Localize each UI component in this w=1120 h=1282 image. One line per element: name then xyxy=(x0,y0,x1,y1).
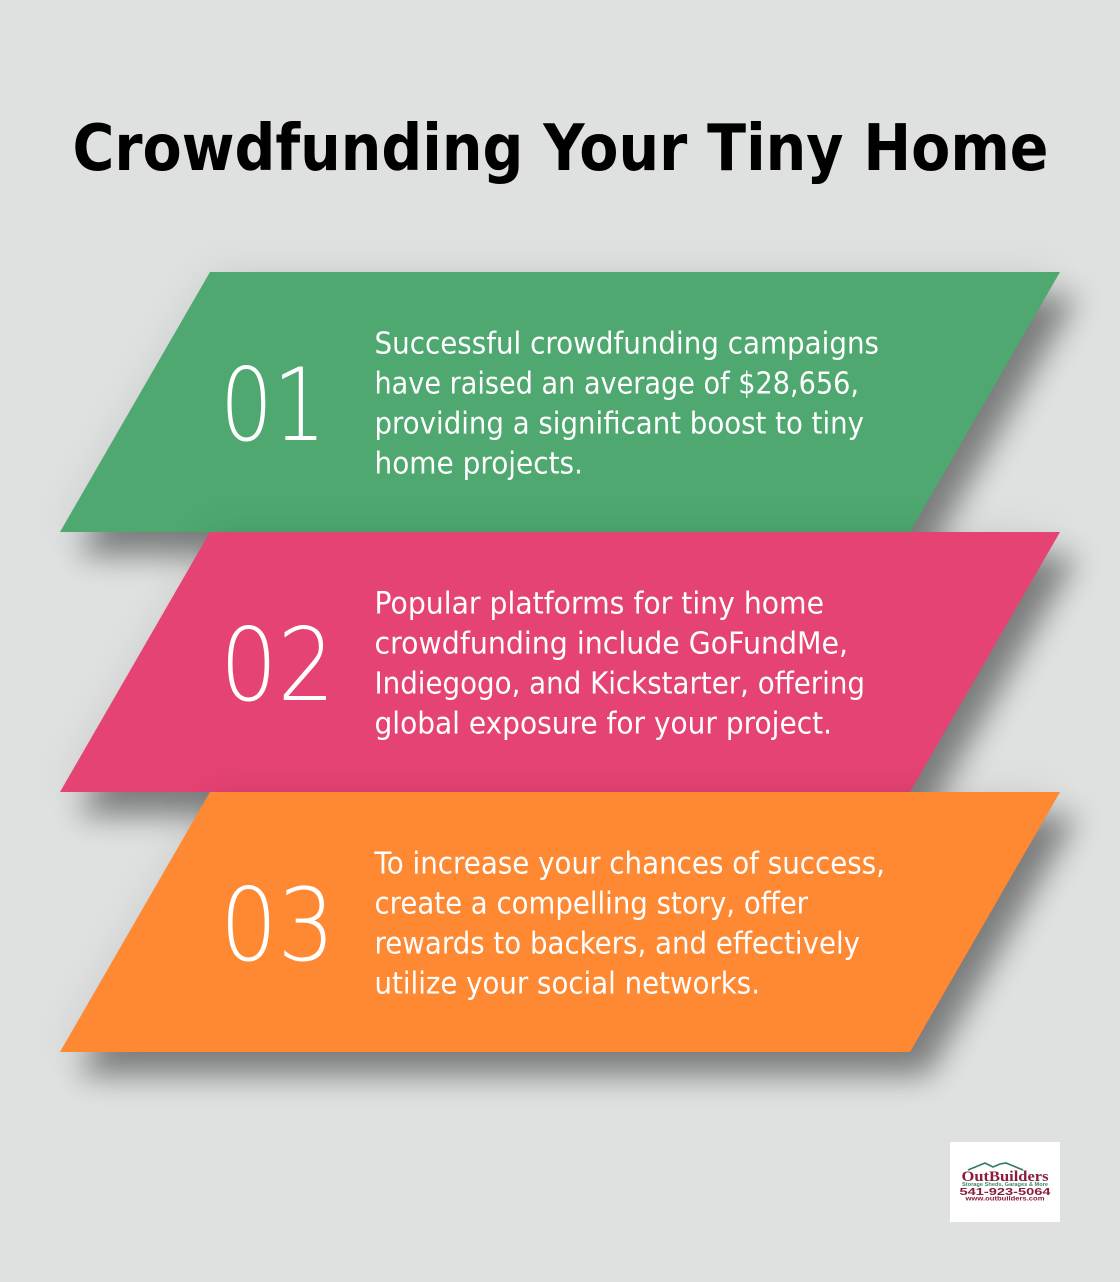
panel: step 01 xyxy=(60,272,1078,556)
text: step 02: global exposure for your project. xyxy=(374,706,832,742)
logo: OutBuilders: OutBuilders xyxy=(962,1169,1049,1185)
text: step 03: rewards to backers, and effectively xyxy=(374,926,860,962)
icon: roofline xyxy=(968,1163,1023,1170)
text: step 03 xyxy=(374,846,885,1002)
panel: step 02 xyxy=(60,532,1078,816)
text: step 02 xyxy=(374,586,865,742)
text: step 01 xyxy=(374,326,879,482)
logo: OutBuilders xyxy=(950,1142,1060,1222)
number 02: 02 xyxy=(220,606,335,724)
text: step 03: utilize your social networks. xyxy=(374,966,760,1002)
number 03: 03 xyxy=(220,866,335,984)
text: step 02: Indiegogo, and Kickstarter, offering xyxy=(374,666,865,702)
panel: step 03 xyxy=(60,792,1078,1076)
text: step 03: To increase your chances of success, xyxy=(374,846,885,882)
text: step 02: crowdfunding include GoFundMe, xyxy=(374,626,848,662)
text: step 01: home projects. xyxy=(374,446,583,482)
number 01: 01 xyxy=(220,346,326,464)
text: step 01: have raised an average of $28,656, xyxy=(374,366,859,402)
logo: OutBuilders: 541-923-5064 xyxy=(960,1187,1051,1198)
text: step 02: Popular platforms for tiny home xyxy=(374,586,824,622)
text: step 03: create a compelling story, offer xyxy=(374,886,809,922)
text: step 01: Successful crowdfunding campaigns xyxy=(374,326,879,362)
logo: OutBuilders: Storage Sheds, Garages & More xyxy=(962,1182,1048,1188)
logo: OutBuilders: www.outbuilders.com xyxy=(964,1196,1044,1202)
text: step 01: providing a significant boost to tiny xyxy=(374,406,864,442)
